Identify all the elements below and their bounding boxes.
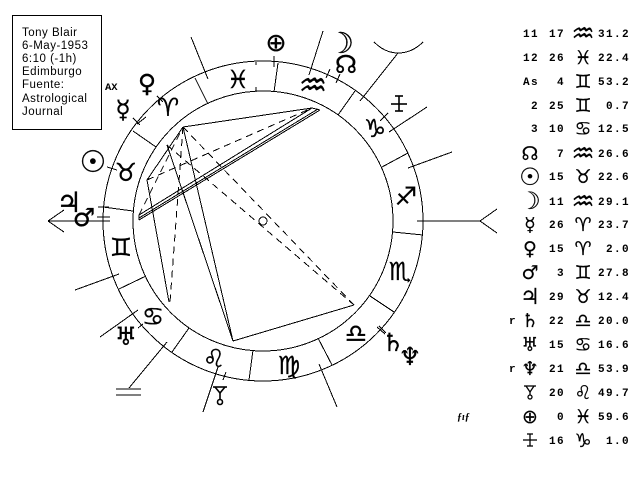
aspect lines: dashed (139, 108, 354, 305)
ascendant axis arrow (48, 210, 110, 232)
center marker (259, 217, 267, 225)
info box: birth data: Journal (22, 106, 63, 118)
row: jupiter: 12.4 (598, 292, 630, 304)
row: mercury (524, 214, 630, 236)
row: neptune: 21 (549, 364, 565, 376)
row: neptune: r (509, 364, 517, 376)
AX label: AX (105, 82, 118, 94)
row: mars (521, 262, 630, 284)
row: chiron: ♌ (574, 382, 592, 404)
row: vertex: ♑ (574, 430, 592, 452)
info box: birth data: Fuente: (22, 79, 64, 91)
row: sun (519, 163, 630, 191)
row: mercury: 23.7 (598, 220, 630, 232)
row: house 2: 2 (531, 101, 539, 113)
row: node: ☊ (522, 143, 538, 165)
row: house 12: 12 (523, 53, 539, 65)
row: saturn: ♄ (521, 310, 539, 332)
row: mars: 27.8 (598, 268, 630, 280)
row: node: 26.6 (598, 149, 630, 161)
row: vertex (523, 430, 630, 452)
row: mercury: 26 (549, 220, 565, 232)
row: ascendant: As (523, 77, 539, 89)
row: part of fortune: 0 (557, 412, 565, 424)
row: house 12: 22.4 (598, 53, 630, 65)
row: mercury: ♈ (574, 214, 592, 236)
row: venus: 2.0 (606, 244, 630, 256)
row: sun: ☉ (519, 163, 541, 191)
row: house 3: 3 (531, 124, 539, 136)
planet glyphs around the wheel: ♃ (56, 186, 82, 219)
zodiac sign glyphs: ♒ (299, 66, 327, 104)
row: chiron: 49.7 (598, 388, 630, 400)
row: venus (523, 238, 630, 260)
row: house 3: ♋ (574, 118, 592, 140)
row: neptune (509, 358, 630, 380)
row: uranus: ♋ (574, 334, 592, 356)
signature mark: ƒıƒ (457, 412, 470, 423)
row: house 11: 31.2 (598, 29, 630, 41)
icon: chiron on wheel (213, 387, 227, 404)
row: neptune: 53.9 (598, 364, 630, 376)
row: part of fortune: ⊕ (522, 406, 538, 428)
planet position ticks (97, 56, 388, 380)
row: moon: 11 (549, 197, 565, 209)
row: jupiter: ♉ (574, 286, 592, 308)
row: jupiter: ♃ (520, 285, 540, 310)
planet glyphs around the wheel: ♀ (138, 69, 156, 98)
info box: birth data: Astrological (22, 93, 87, 105)
zodiac sign glyphs: ♈ (157, 93, 179, 122)
row: node: 7 (557, 149, 565, 161)
row: saturn: r (509, 316, 517, 328)
info box: birth data (12, 16, 102, 130)
row: node: ♒ (571, 139, 595, 169)
row: saturn: 20.0 (598, 316, 630, 328)
info box: birth data: Tony Blair (22, 27, 78, 39)
row: uranus (521, 334, 630, 356)
row: part of fortune (522, 406, 630, 428)
planet glyphs around the wheel: ☿ (115, 95, 131, 124)
row: house 12 (523, 47, 630, 69)
row: uranus: 16.6 (598, 340, 630, 352)
planet glyphs around the wheel: ☊ (335, 50, 357, 79)
row: jupiter (520, 285, 630, 310)
row: chiron (524, 382, 630, 404)
row: vertex: 1.0 (606, 436, 630, 448)
planet glyphs around the wheel: ⊕ (266, 28, 286, 57)
row: mars: ♂ (521, 262, 539, 284)
zodiac sign glyphs: ♋ (142, 302, 164, 331)
planet glyphs around the wheel: ♆ (399, 342, 421, 371)
midheaven line with arc symbol (360, 42, 423, 101)
row: mercury: ☿ (524, 214, 536, 236)
zodiac sign glyphs: ♑ (364, 114, 386, 143)
planet glyphs around the wheel: ♄ (382, 328, 404, 357)
row: ascendant: ♊ (574, 71, 592, 93)
zodiac sign glyphs: ♉ (115, 158, 137, 187)
row: sun: ♉ (574, 166, 592, 188)
row: part of fortune: 59.6 (598, 412, 630, 424)
row: uranus: 15 (549, 340, 565, 352)
row: neptune: ♎ (574, 358, 592, 380)
row: neptune: ♆ (521, 358, 539, 380)
row: node (522, 139, 630, 169)
aspect lines: solid (139, 108, 354, 341)
row: saturn (509, 310, 630, 332)
zodiac sign glyphs: ♓ (227, 65, 249, 94)
planet glyphs around the wheel: ♅ (115, 322, 137, 351)
row: venus: ♀ (523, 238, 537, 260)
planet glyphs around the wheel: ♂ (73, 203, 95, 232)
row: moon: ♒ (571, 187, 595, 217)
row: vertex: 16 (549, 436, 565, 448)
row: moon: ☽ (519, 187, 541, 215)
row: mars: 3 (557, 268, 565, 280)
row: house 2: 0.7 (606, 101, 630, 113)
row: jupiter: 29 (549, 292, 565, 304)
row: uranus: ♅ (521, 334, 539, 356)
row: chiron: 20 (549, 388, 565, 400)
row: saturn: 22 (549, 316, 565, 328)
row: saturn: ♎ (574, 310, 592, 332)
row: venus: 15 (549, 244, 565, 256)
zodiac sign glyphs: ♐ (395, 182, 417, 211)
zodiac sign glyphs: ♏ (389, 257, 411, 286)
row: part of fortune: ♓ (574, 406, 592, 428)
row: ascendant: 4 (557, 77, 565, 89)
planet glyphs around the wheel: ☽ (328, 26, 354, 60)
info box: birth data: 6-May-1953 (22, 40, 88, 52)
row: house 11 (523, 19, 630, 49)
planet glyphs around the wheel: ☉ (80, 145, 106, 180)
info box: birth data: 6:10 (-1h) (22, 53, 77, 65)
row: house 3: 12.5 (598, 124, 630, 136)
row: house 3 (531, 118, 630, 140)
zodiac sign glyphs: ♎ (345, 319, 367, 348)
row: house 2 (531, 95, 630, 117)
row: moon: 29.1 (598, 197, 630, 209)
row: mars: ♊ (574, 262, 592, 284)
row: house 11: 17 (549, 29, 565, 41)
zodiac wheel rings and sign dividers (103, 61, 423, 381)
house cusp lines (75, 31, 452, 412)
zodiac sign glyphs: ♊ (110, 233, 132, 262)
info box: birth data: Edimburgo (22, 66, 82, 78)
row: ascendant (523, 71, 630, 93)
planet glyphs around the wheel (56, 26, 421, 371)
row: house 12: 26 (549, 53, 565, 65)
zodiac sign glyphs: ♌ (203, 344, 225, 373)
row: ascendant: 53.2 (598, 77, 630, 89)
row: moon (519, 187, 630, 217)
imum coeli line with double bar (116, 342, 167, 395)
row: house 2: 25 (549, 101, 565, 113)
icon: vertex cross on wheel (391, 96, 407, 111)
row: house 12: ♓ (574, 47, 592, 69)
row: venus: ♈ (574, 238, 592, 260)
zodiac sign glyphs (110, 65, 417, 380)
row: house 2: ♊ (574, 95, 592, 117)
row: house 3: 10 (549, 124, 565, 136)
descendant axis arrow (417, 209, 497, 233)
row: house 11: ♒ (571, 19, 595, 49)
position table (509, 19, 630, 452)
row: house 11: 11 (523, 29, 539, 41)
row: sun: 15 (549, 172, 565, 184)
row: sun: 22.6 (598, 172, 630, 184)
zodiac sign glyphs: ♍ (278, 351, 300, 380)
